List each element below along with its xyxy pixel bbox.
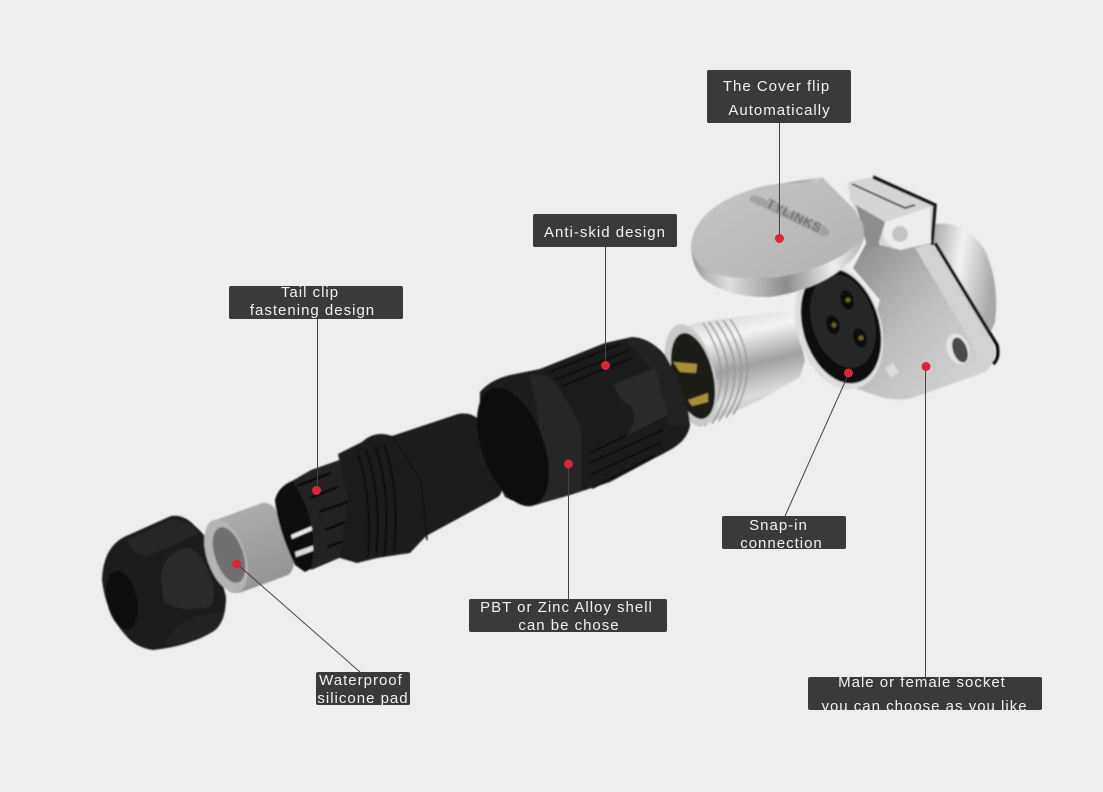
cap nut — [101, 516, 226, 650]
label: anti-skid: Anti-skid design — [544, 224, 666, 241]
flip cover — [691, 177, 864, 297]
label: shell: can be chose — [518, 617, 620, 634]
label: anti-skid — [533, 214, 677, 247]
label: socket — [808, 674, 1042, 715]
label: snap-in — [722, 516, 846, 552]
red marker dots — [232, 234, 930, 568]
label: cover flip — [707, 70, 851, 123]
label: shell: PBT or Zinc Alloy shell — [480, 599, 653, 616]
silicone pad — [196, 503, 294, 598]
socket front ring and contacts — [780, 254, 898, 400]
metal plug — [655, 312, 805, 431]
label: shell — [469, 599, 667, 634]
coupling sleeve — [463, 337, 690, 516]
label: snap-in: connection — [740, 535, 823, 552]
label: socket: you can choose as you like — [821, 698, 1028, 715]
label: tail clip: fastening design — [250, 302, 375, 319]
socket back cylinder — [930, 224, 996, 345]
label: silicone pad: Waterproof — [319, 672, 403, 689]
leader lines — [237, 123, 926, 677]
connector product artwork — [101, 177, 998, 650]
hinge — [848, 177, 935, 250]
label: silicone pad — [316, 672, 410, 707]
label: snap-in: Snap-in — [749, 517, 808, 534]
embossed logo: TYLINKS — [764, 196, 824, 235]
label: cover flip: The Cover flip — [723, 78, 830, 95]
label: socket: Male or female socket — [838, 674, 1006, 691]
label: cover flip: Automatically — [728, 102, 831, 119]
socket flange body — [853, 240, 998, 400]
label: tail clip: Tail clip — [281, 284, 339, 301]
threaded section and hex nut — [338, 414, 503, 563]
label: tail clip — [229, 284, 403, 319]
label: silicone pad: silicone pad — [317, 690, 409, 707]
clip fingers and pins — [275, 458, 372, 572]
